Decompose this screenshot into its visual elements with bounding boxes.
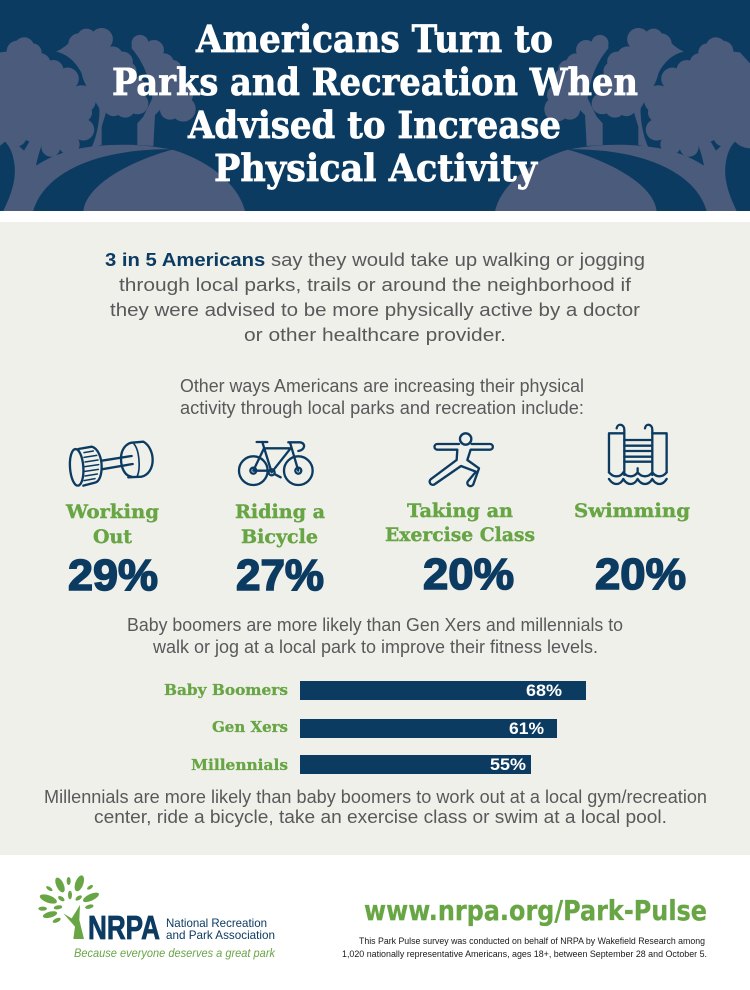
survey footnote: 1,020 nationally representative Americans, ages 18+, between September 28 and October 5.	[342, 949, 707, 959]
icon: tree with leaves	[38, 874, 100, 939]
intro text block	[105, 250, 645, 345]
bar: baby boomers	[164, 681, 586, 700]
survey footnote: This Park Pulse survey was conducted on behalf of NRPA by Wakefield Research among	[359, 936, 705, 946]
logo: NRPA: Because everyone deserves a great park	[74, 946, 276, 960]
title	[112, 17, 638, 190]
stat: working out: 29%	[68, 551, 158, 600]
stat: swimming	[574, 500, 690, 599]
header banner	[0, 0, 750, 222]
stat: taking an exercise class: 20%	[423, 550, 514, 599]
generation comparison text: Baby boomers are more likely than Gen Xers and millennials to	[127, 615, 623, 635]
bar: gen xers: Gen Xers	[212, 718, 288, 736]
stat: swimming: 20%	[595, 550, 686, 599]
sub-heading text: Other ways Americans are increasing their physical	[180, 376, 584, 396]
stat: working out: Out	[93, 526, 132, 548]
icon: bicycle	[239, 442, 313, 485]
stat: swimming: Swimming	[574, 500, 690, 522]
stat: working out	[65, 501, 159, 600]
sub-heading text	[180, 376, 584, 418]
generation comparison text: walk or jog at a local park to improve their fitness levels.	[152, 637, 598, 657]
title: Advised to Increase	[187, 103, 561, 147]
closing text block: center, ride a bicycle, take an exercise class or swim at a local pool.	[94, 807, 667, 827]
logo: NRPA: National Recreation	[166, 916, 267, 930]
closing text block: Millennials are more likely than baby boomers to work out at a local gym/recreation	[44, 787, 707, 807]
illustration: left trees and hills	[0, 28, 245, 211]
generation comparison text	[127, 615, 623, 657]
closing text block	[44, 787, 707, 827]
stat: riding a bicycle: 27%	[236, 551, 324, 600]
icon: exercise class figure	[430, 433, 493, 486]
bar: millennials: Millennials	[191, 756, 288, 774]
sub-heading text: activity through local parks and recreation include:	[180, 398, 584, 418]
bar chart	[164, 681, 586, 774]
stat: riding a bicycle	[235, 501, 325, 600]
intro text block: or other healthcare provider.	[244, 325, 506, 345]
intro text block: 3 in 5 Americans say they would take up walking or jogging	[105, 250, 645, 270]
title: Parks and Recreation When	[112, 60, 638, 104]
bar: baby boomers: Baby Boomers	[164, 681, 288, 699]
title: Physical Activity	[214, 146, 538, 190]
icon: dumbbell	[69, 442, 153, 486]
panel: main background	[0, 222, 750, 855]
intro text block: they were advised to be more physically active by a doctor	[110, 300, 640, 320]
bar: millennials: 55%	[490, 755, 526, 774]
title: Americans Turn to	[195, 17, 553, 61]
stat: riding a bicycle: Bicycle	[241, 526, 318, 548]
illustration: right trees and hills	[495, 28, 750, 211]
logo: NRPA: NRPA	[88, 909, 160, 946]
bar: gen xers	[212, 718, 557, 738]
logo: NRPA	[38, 874, 276, 960]
icon: swimming pool ladder	[609, 425, 667, 484]
stat: riding a bicycle: Riding a	[235, 501, 325, 523]
bar: millennials	[191, 755, 531, 774]
logo: NRPA: and Park Association	[166, 928, 275, 942]
bar: baby boomers: 68%	[526, 681, 562, 700]
stat: taking an exercise class: Exercise Class	[385, 524, 535, 546]
intro text block: through local parks, trails or around the neighborhood if	[119, 275, 632, 295]
bar: gen xers: 61%	[509, 719, 544, 738]
stat: taking an exercise class	[385, 500, 535, 599]
stat: working out: Working	[65, 501, 159, 523]
stat: taking an exercise class: Taking an	[407, 500, 513, 522]
survey footnote	[342, 936, 707, 959]
